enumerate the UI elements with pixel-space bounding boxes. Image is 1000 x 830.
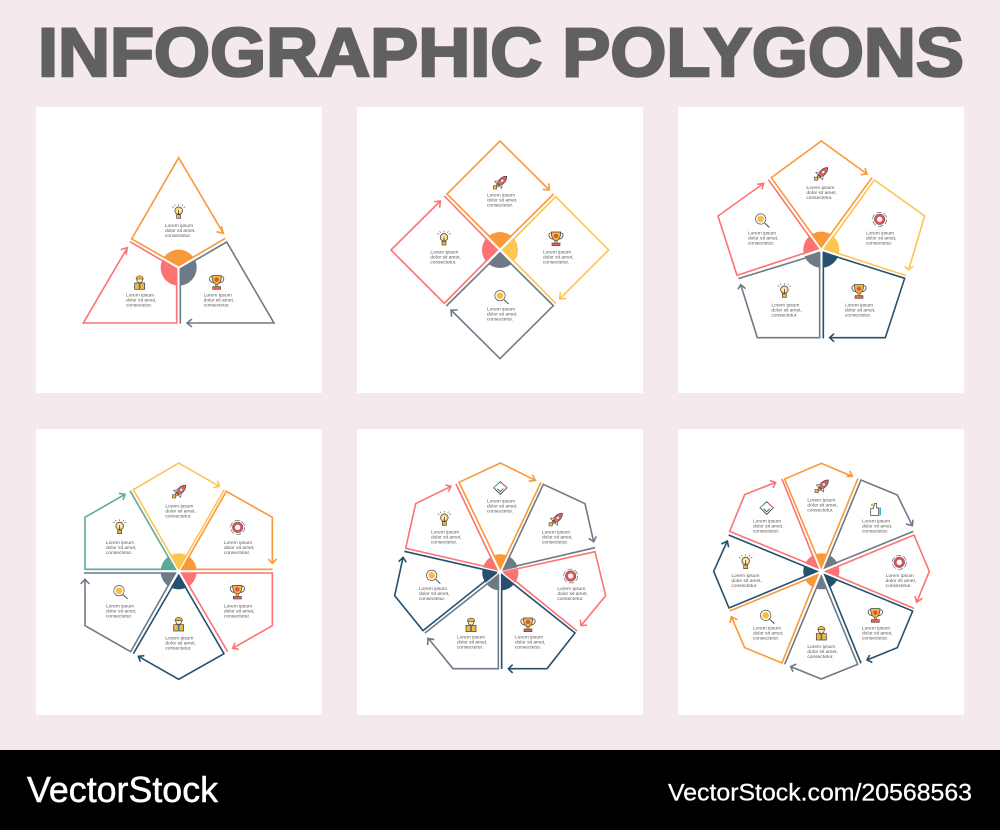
text block: Lorem ipsum <box>886 574 914 579</box>
text block: consectetur. <box>487 317 513 323</box>
text block: dolor sit amet, <box>542 535 573 541</box>
icon: search <box>114 585 128 599</box>
icon: bulb <box>172 204 185 218</box>
text block: dolor sit amet, <box>771 307 802 313</box>
icon: hands <box>494 482 507 494</box>
text block: Lorem ipsum <box>771 303 799 308</box>
title: INFOGRAPHIC POLYGONS <box>38 14 964 91</box>
text block: consectetur. <box>487 202 513 208</box>
text block: Lorem ipsum <box>106 604 134 609</box>
text block: consectetur. <box>806 195 833 201</box>
text block: consectetur. <box>165 513 192 519</box>
text block: consectetur. <box>487 509 513 515</box>
segment: red <box>504 552 606 631</box>
text block: consectetur. <box>771 312 798 318</box>
segment: yellow <box>503 197 609 304</box>
icon: gear <box>231 520 245 534</box>
segment: red <box>718 180 818 275</box>
text block: dolor sit amet, <box>515 640 546 646</box>
icon: search <box>755 214 769 227</box>
text block: dolor sit amet, <box>419 591 450 597</box>
text block: consectetur. <box>430 259 457 265</box>
segment: red <box>406 484 496 569</box>
text block: consectetur. <box>106 550 132 556</box>
text block: dolor sit amet, <box>106 545 137 551</box>
text block: Lorem ipsum <box>542 531 570 536</box>
text block: consectetur. <box>886 583 912 589</box>
segment: grey <box>446 253 553 359</box>
segment: grey <box>180 242 274 327</box>
panel: octagon diagram <box>678 429 964 715</box>
footer url: VectorStock.com/20568563 <box>668 780 972 806</box>
text block: consectetur. <box>845 312 871 318</box>
text block: consectetur. <box>807 654 834 660</box>
text block: dolor sit amet, <box>862 524 893 530</box>
text block: Lorem ipsum <box>224 541 252 546</box>
text block: dolor sit amet, <box>457 640 488 646</box>
text block: Lorem ipsum <box>807 645 835 650</box>
text block: consectetur. <box>457 645 483 651</box>
center pie <box>481 554 519 592</box>
text block: dolor sit amet, <box>806 190 837 196</box>
text block: Lorem ipsum <box>753 627 781 632</box>
icon: rocket <box>812 164 831 183</box>
center pie <box>803 553 839 589</box>
text block: consectetur. <box>165 233 191 239</box>
text block: consectetur. <box>165 646 192 652</box>
footer brand: VectorStock <box>27 769 219 810</box>
text block: Lorem ipsum <box>431 531 459 536</box>
icon: trophy <box>210 276 224 289</box>
segment: dark blue <box>825 575 913 663</box>
segment: grey <box>738 254 820 338</box>
text block: Lorem ipsum <box>419 587 447 592</box>
text block: Lorem ipsum <box>515 636 543 641</box>
text block: Lorem ipsum <box>487 500 515 505</box>
segment: grey <box>504 484 596 569</box>
text block: dolor sit amet, <box>807 649 838 655</box>
segment: dark blue <box>133 576 224 679</box>
panel: hexagon diagram <box>36 429 322 715</box>
text block: dolor sit amet, <box>165 641 196 647</box>
text block: Lorem ipsum <box>806 186 834 191</box>
text block: Lorem ipsum <box>487 308 515 313</box>
footer bar <box>0 750 1000 830</box>
text block: dolor sit amet, <box>845 307 876 313</box>
text block: consectetur. <box>543 259 569 265</box>
text block: Lorem ipsum <box>126 294 154 299</box>
text block: consectetur. <box>866 241 892 247</box>
icon: gear <box>873 212 887 226</box>
text block: consectetur. <box>731 583 758 589</box>
text block: Lorem ipsum <box>487 193 515 198</box>
text block: dolor sit amet, <box>487 504 518 510</box>
segment: orange <box>182 491 277 569</box>
icon: search <box>495 290 509 304</box>
text block: dolor sit amet, <box>165 228 196 234</box>
text block: Lorem ipsum <box>165 504 193 509</box>
segment: red <box>826 535 929 608</box>
icon: bulb <box>778 283 791 297</box>
text block: dolor sit amet, <box>557 591 588 597</box>
segment: green <box>85 491 175 569</box>
text block: consectetur. <box>753 529 779 535</box>
icon: trophy <box>852 285 866 298</box>
text block: dolor sit amet, <box>753 524 784 530</box>
text block: consectetur. <box>224 550 250 556</box>
center pie <box>161 250 197 287</box>
icon: person <box>174 617 184 631</box>
text block: dolor sit amet, <box>731 578 762 584</box>
text block: dolor sit amet, <box>224 608 255 614</box>
center pie <box>159 553 198 589</box>
text block: Lorem ipsum <box>165 224 193 229</box>
panel: triangle diagram <box>36 107 322 393</box>
text block: Lorem ipsum <box>753 520 781 525</box>
panel: square diagram <box>357 107 643 393</box>
text block: consectetur. <box>106 613 132 619</box>
text block: dolor sit amet, <box>487 312 518 318</box>
segment: dark blue <box>395 551 496 631</box>
segment: orange <box>771 141 872 247</box>
text block: Lorem ipsum <box>430 250 458 255</box>
text block: consectetur. <box>753 636 779 642</box>
text block: Lorem ipsum <box>862 520 890 525</box>
segment: grey <box>825 480 913 567</box>
text block: consectetur. <box>126 303 152 309</box>
text block: dolor sit amet, <box>866 236 897 242</box>
text block: Lorem ipsum <box>165 637 193 642</box>
text block: consectetur. <box>557 596 584 602</box>
icon: trophy <box>868 609 882 622</box>
text block: Lorem ipsum <box>224 604 252 609</box>
segment: grey <box>785 576 858 679</box>
icon: search <box>760 610 774 624</box>
text block: dolor sit amet, <box>748 236 779 242</box>
icon: rocket <box>491 173 510 192</box>
icon: trophy <box>549 232 563 246</box>
text block: Lorem ipsum <box>845 303 873 308</box>
segment: yellow <box>133 463 224 569</box>
icon: rocket <box>813 476 832 495</box>
panel: heptagon diagram <box>357 429 643 715</box>
icon: person <box>816 626 826 640</box>
segment: red <box>83 242 177 323</box>
text block: Lorem ipsum <box>748 232 776 237</box>
segment: orange <box>447 141 554 247</box>
icon: person <box>466 618 476 632</box>
icon: trophy <box>230 585 244 599</box>
text block: dolor sit amet, <box>165 508 196 514</box>
panel: pentagon diagram <box>678 107 964 393</box>
segment: red <box>182 573 272 652</box>
icon: bulb <box>113 519 126 534</box>
text block: Lorem ipsum <box>457 636 485 641</box>
segment: grey <box>81 573 175 652</box>
text block: Lorem ipsum <box>204 294 232 299</box>
text block: Lorem ipsum <box>866 232 894 237</box>
text block: dolor sit amet, <box>886 578 916 584</box>
text block: consectetur. <box>748 241 774 247</box>
text block: dolor sit amet, <box>126 298 157 304</box>
segment: orange <box>785 463 858 567</box>
icon: bulb <box>437 231 451 245</box>
segment: orange <box>730 575 817 663</box>
text block: dolor sit amet, <box>224 545 255 551</box>
text block: consectetur. <box>807 508 834 514</box>
text block: consectetur. <box>542 540 568 546</box>
segment: red <box>730 479 817 567</box>
text block: dolor sit amet, <box>204 298 234 304</box>
text block: consectetur. <box>419 596 445 602</box>
segment: dark blue <box>823 253 905 342</box>
text block: Lorem ipsum <box>862 627 890 632</box>
text block: dolor sit amet, <box>487 197 518 203</box>
text block: consectetur. <box>862 529 888 535</box>
text block: dolor sit amet, <box>543 254 574 260</box>
icon: gear <box>564 569 578 583</box>
segment: grey <box>425 575 498 669</box>
text block: consectetur. <box>515 645 541 651</box>
center pie <box>482 232 518 268</box>
text block: consectetur. <box>862 636 888 642</box>
segment: orange <box>459 463 541 568</box>
center pie <box>803 232 839 269</box>
text block: Lorem ipsum <box>557 587 585 592</box>
icon: bulb <box>739 554 752 569</box>
text block: consectetur. <box>204 303 230 309</box>
text block: Lorem ipsum <box>543 250 571 255</box>
icon: rocket <box>547 510 566 529</box>
segment: orange <box>132 158 225 266</box>
icon: person <box>135 276 145 289</box>
text block: Lorem ipsum <box>106 541 134 546</box>
text block: consectetur. <box>224 613 250 619</box>
text block: consectetur. <box>431 540 457 546</box>
text block: dolor sit amet, <box>753 631 784 637</box>
text block: dolor sit amet, <box>807 503 838 509</box>
text block: Lorem ipsum <box>807 499 835 504</box>
text block: dolor sit amet, <box>106 608 137 614</box>
text block: dolor sit amet, <box>431 535 462 541</box>
segment: dark blue <box>714 535 817 608</box>
segment: dark blue <box>502 575 575 673</box>
segment: red <box>391 196 497 303</box>
text block: Lorem ipsum <box>731 574 759 579</box>
icon: thumb <box>871 503 881 515</box>
icon: rocket <box>170 482 189 501</box>
text block: dolor sit amet, <box>862 631 893 637</box>
icon: hands <box>760 502 773 514</box>
icon: gear <box>892 555 906 569</box>
segment: yellow <box>825 180 925 276</box>
text block: dolor sit amet, <box>430 254 461 260</box>
icon: search <box>426 570 440 584</box>
icon: trophy <box>521 618 535 632</box>
icon: bulb <box>438 511 451 525</box>
